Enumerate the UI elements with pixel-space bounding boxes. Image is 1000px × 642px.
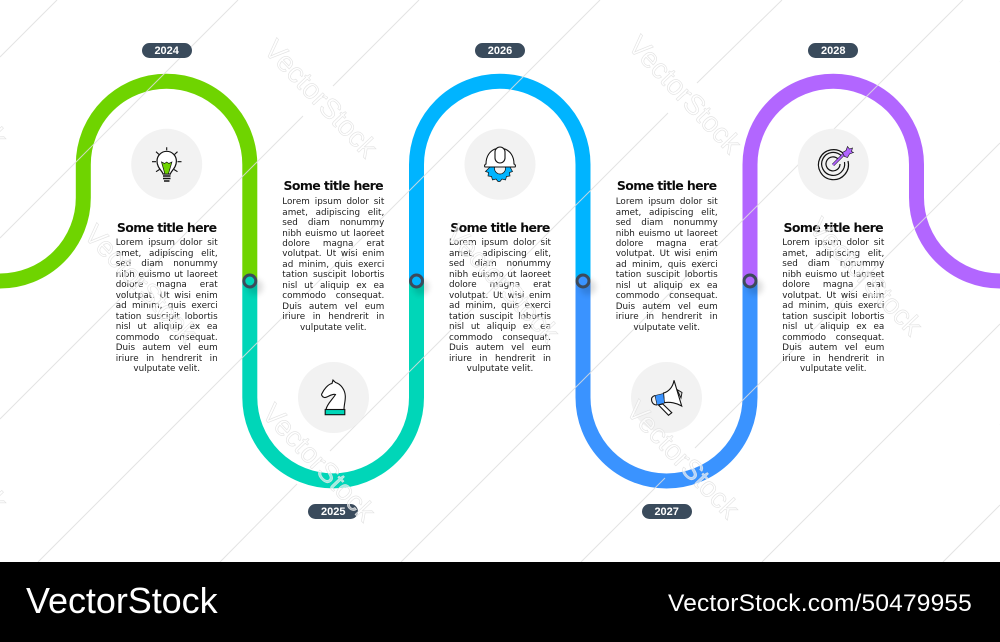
column 2: text: vulputate velit. [300,323,367,333]
column 4: text: Lorem ipsum dolor sit [616,197,718,207]
column 4: text: vulputate velit. [633,323,700,333]
column 2: title: Some title here [284,178,383,193]
icon: chess knight [298,362,369,433]
watermark text overlay: VectorStock [258,34,384,164]
column 4: text: iriure in hendrerit in [616,312,718,322]
column 3: text: nibh euismo ut laoreet [449,270,551,280]
column 3: text: Duis autem vel eum [449,343,551,353]
watermark text overlay: VectorStock [440,219,566,349]
column 5: text: tation suscipit lobortis [782,312,884,322]
column 2: text: Lorem ipsum dolor sit [282,197,384,207]
column 5: text: volutpat. Ut wisi enim [782,291,884,301]
column 4: text: ad minim, quis exerci [616,260,718,270]
column 1: text: nisl ut aliquip ex ea [116,322,218,332]
column 3: text [449,238,551,374]
column 5: text: sed diam nonummy [782,259,884,269]
column 5: text: vulputate velit. [800,364,867,374]
year pill 2027 [642,504,692,519]
column 4: text: sed diam nonummy [616,218,718,228]
column 5: text: nibh euismo ut laoreet [782,270,884,280]
icon: light bulb [131,129,202,200]
column 5: title: Some title here [784,220,883,234]
watermark text overlay: VectorStock [622,30,748,160]
column 5: text: ad minim, quis exerci [782,301,884,311]
year pill 2027: 2027 [654,506,679,518]
column 1: text: ad minim, quis exerci [116,301,218,311]
column 1: text: vulputate velit. [133,364,200,374]
year pill 2024 [142,43,192,58]
column 1: text: Duis autem vel eum [116,343,218,353]
column 5: text: Lorem ipsum dolor sit [782,238,884,248]
column 1: title: Some title here [117,220,216,234]
column 3: text: Lorem ipsum dolor sit [449,238,551,248]
column 1: text: commodo consequat. [116,333,218,343]
segment 2026 [416,81,583,281]
column 2: text: nibh euismo ut laoreet [282,228,384,238]
column 2: text: iriure in hendrerit in [282,312,384,322]
column 4: text: nisl ut aliquip ex ea [616,281,718,291]
column 5: text [782,238,884,374]
column 5: text: Duis autem vel eum [782,343,884,353]
icon: target with dart [798,129,869,200]
column 5: text: dolore magna erat [782,280,884,290]
column 1: text: volutpat. Ut wisi enim [116,291,218,301]
column 3: text: dolore magna erat [449,280,551,290]
footer bar [0,562,1000,642]
segment 2024 [0,81,250,281]
column 3: text: iriure in hendrerit in [449,354,551,364]
column 3: text: volutpat. Ut wisi enim [449,291,551,301]
column 3: title: Some title here [450,220,550,234]
node 4 [744,275,763,295]
column 3: text: nisl ut aliquip ex ea [449,322,551,332]
column 3: text: tation suscipit lobortis [449,312,551,322]
column 5: text: commodo consequat. [782,333,884,343]
column 1: text: nibh euismo ut laoreet [116,270,218,280]
year pill 2028: 2028 [821,45,846,57]
column 2: text: commodo consequat. [282,291,384,301]
footer brand: VectorStock [26,580,218,621]
column 1: text: sed diam nonummy [116,259,218,269]
icon: megaphone [631,362,702,433]
node 3 [577,275,596,295]
watermark text overlay: VectorStock [256,398,382,528]
column 5: text: nisl ut aliquip ex ea [782,322,884,332]
column 4: text: volutpat. Ut wisi enim [616,249,718,259]
column 4: text [616,197,718,333]
column 4: text: dolore magna erat [616,239,718,249]
column 2: text: ad minim, quis exerci [282,260,384,270]
column 4: text: Duis autem vel eum [616,302,718,312]
watermark text overlay: VectorStock [803,212,929,342]
column 1: text: iriure in hendrerit in [116,354,218,364]
column 3: text: ad minim, quis exerci [449,301,551,311]
icon: helmet and gear [464,129,536,200]
column 2: text: tation suscipit lobortis [282,270,384,280]
footer image id: VectorStock.com/50479955 [668,590,972,617]
year pill 2025 [308,504,358,519]
column 2: text: sed diam nonummy [282,218,384,228]
column 2: text: Duis autem vel eum [282,302,384,312]
column 2: text: volutpat. Ut wisi enim [282,249,384,259]
segment 2025 [250,281,416,481]
watermark text overlay: VectorStock [78,219,204,349]
column 3: text: commodo consequat. [449,333,551,343]
column 1: text: Lorem ipsum dolor sit [116,238,218,248]
column 4: title: Some title here [617,178,716,193]
node 1 [244,275,263,295]
column 5: text: amet, adipiscing elit, [782,249,884,259]
year pill 2026 [475,43,525,58]
column 4: text: amet, adipiscing elit, [616,208,718,218]
column 1: text [116,238,218,374]
column 4: text: commodo consequat. [616,291,718,301]
column 2: text: dolore magna erat [282,239,384,249]
column 5: text: iriure in hendrerit in [782,354,884,364]
column 1: text: tation suscipit lobortis [116,312,218,322]
year pill 2025: 2025 [321,506,346,518]
column 2: text: nisl ut aliquip ex ea [282,281,384,291]
segment 2028 [750,81,1000,281]
column 3: text: sed diam nonummy [449,259,551,269]
watermark text overlay: VectorStock [620,395,746,525]
year pill 2024: 2024 [154,45,179,57]
year pill 2026: 2026 [488,45,512,57]
segment 2027 [583,281,750,481]
column 3: text: vulputate velit. [467,364,533,374]
column 1: text: dolore magna erat [116,280,218,290]
column 4: text: tation suscipit lobortis [616,270,718,280]
column 2: text: amet, adipiscing elit, [282,208,384,218]
column 4: text: nibh euismo ut laoreet [616,228,718,238]
column 1: text: amet, adipiscing elit, [116,249,218,259]
year pill 2028 [808,43,858,58]
column 3: text: amet, adipiscing elit, [449,249,551,259]
node 2 [410,275,429,295]
column 2: text [282,197,384,333]
